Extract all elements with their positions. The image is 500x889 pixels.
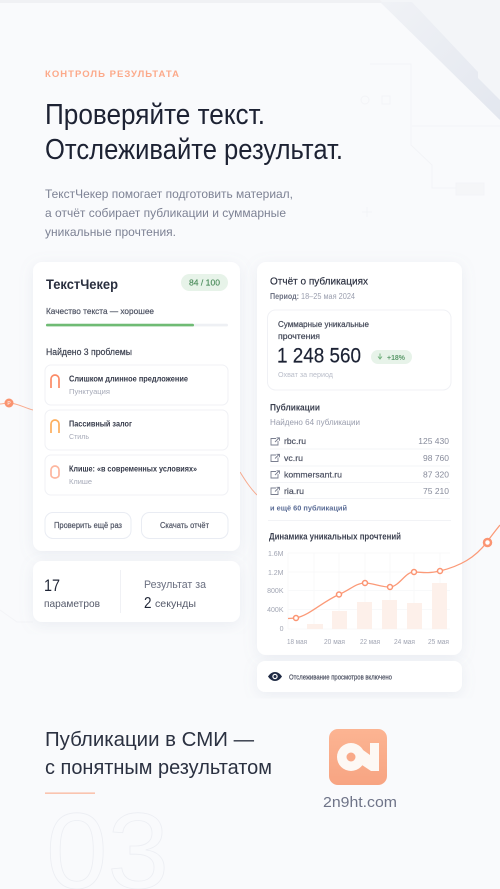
stat: parameters: 17 [44,576,60,595]
x axis [287,639,449,646]
y axis: 800K [267,588,284,595]
closing statement: Публикации в СМИ — [45,728,254,751]
report heading: Отчёт о публикациях [270,276,368,288]
issue: long sentence: Пунктуация [69,387,110,396]
button: check again [45,512,131,538]
issue: long sentence: Слишком длинное предложение [69,374,188,384]
button: download report [142,512,228,538]
intro text [45,187,293,239]
issue: passive voice: Пассивный залог [69,420,133,428]
website: 2n9ht.com [323,794,397,811]
icon: left node [4,398,14,408]
stat: time: 2 [144,595,152,612]
row: vc: vc.ru [284,453,303,463]
panel: text checker [33,262,240,551]
intro text: а отчёт собирает публикации и суммарные [45,206,286,220]
stat: time: Результат за [144,579,207,591]
stat: time [144,579,207,612]
issues heading: Найдено 3 проблемы [46,347,132,357]
x axis: 24 мая [394,639,415,646]
row: kommersant: 87 320 [423,470,449,480]
logo [329,729,387,785]
more publications link: и ещё 60 публикаций [270,504,347,512]
period: Период: [270,292,299,301]
progress bar [46,324,228,326]
panel: tracking status: Отслеживание просмотров включено [289,672,392,682]
total reads box: Охват за период [278,372,333,379]
row: ria [271,486,449,496]
issue: cliche [45,455,228,495]
button: check again: Проверить ещё раз [54,521,122,530]
row: rbc [271,436,449,446]
x axis: 22 мая [360,639,380,646]
issue: long sentence [45,365,228,405]
stat: parameters [44,576,100,610]
title: Проверяйте текст. [45,99,265,131]
period [270,292,355,301]
title [45,99,343,166]
closing statement [45,728,272,779]
icon: left node: P [7,401,11,407]
issue: cliche: Клише: «в современных условиях» [69,464,197,474]
chart heading: Динамика уникальных прочтений [269,532,401,542]
growth badge: +18% [387,353,405,362]
row: kommersant [271,470,449,480]
bars [307,583,447,629]
intro text: уникальные прочтения. [45,225,176,239]
score badge [181,274,228,291]
row: rbc: 125 430 [418,436,449,446]
chart [267,551,450,646]
row: rbc: rbc.ru [284,436,306,446]
row: ria: 75 210 [423,486,449,496]
row: kommersant: kommersant.ru [284,470,342,480]
stat: time: секунды [155,598,196,610]
panel: publications report [257,262,462,655]
row: vc: 98 760 [423,453,449,463]
line chart trend [288,525,500,620]
y axis [267,551,284,633]
closing statement: с понятным результатом [45,756,272,779]
publications heading: Публикации [270,402,320,412]
period: 18–25 мая 2024 [301,292,355,301]
stat: parameters: параметров [44,598,100,610]
row: ria: ria.ru [284,486,304,496]
issue: passive voice: Стиль [69,432,89,441]
eyebrow label: КОНТРОЛЬ РЕЗУЛЬТАТА [45,69,179,80]
quality label: Качество текста — хорошее [46,306,154,316]
score badge: 84 / 100 [189,278,220,288]
y axis: 400K [267,607,284,614]
intro text: ТекстЧекер помогает подготовить материал, [45,187,293,201]
card title: ТекстЧекер [46,276,118,292]
panel: publications report: Найдено 64 публикации [270,418,360,427]
total reads box: Суммарные уникальные [278,320,370,329]
row: vc [271,453,449,463]
logo mark [337,743,379,771]
icon: eye [268,672,282,681]
y axis: 1.2M [268,570,284,577]
panel: tracking status [257,661,462,692]
total reads box [268,310,451,390]
total reads box: прочтения [278,332,320,341]
accent line [45,792,95,794]
issue: passive voice [45,410,228,450]
connector line: left [0,398,257,495]
growth badge [371,350,412,364]
issue: cliche: Клише [69,477,92,486]
x axis: 20 мая [324,639,345,646]
button: download report: Скачать отчёт [160,521,209,530]
panel: stats [33,561,240,622]
x axis: 25 мая [428,639,449,646]
y axis: 0 [280,626,284,633]
icon: end node [484,539,491,546]
y axis: 1.6M [268,551,284,558]
publications list [270,436,450,498]
big number: 1 248 560 [277,344,361,368]
x axis: 18 мая [287,639,307,646]
title: Отслеживайте результат. [45,134,343,166]
